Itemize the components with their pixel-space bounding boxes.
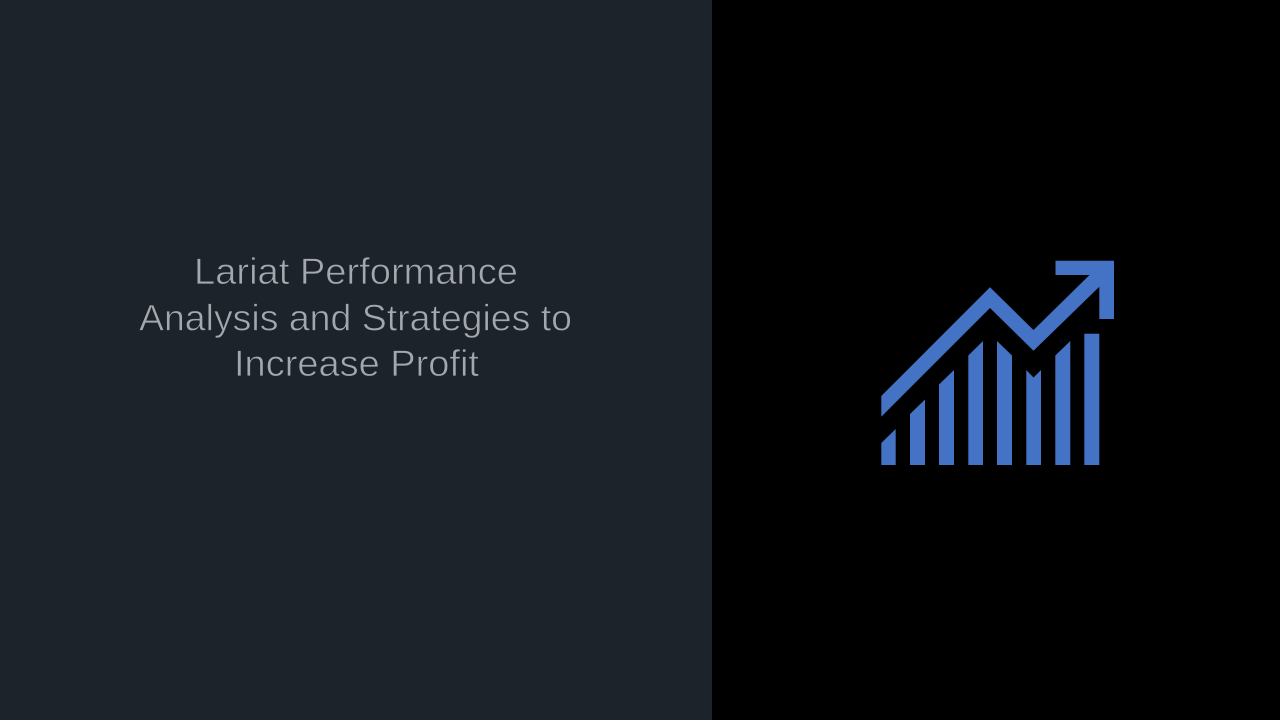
title: Analysis and Strategies to xyxy=(139,298,572,338)
title xyxy=(139,251,572,384)
title: Increase Profit xyxy=(234,343,480,384)
icon: chart bars xyxy=(881,334,1099,465)
panel: right black background xyxy=(712,0,1280,720)
icon: rising bar chart with arrow xyxy=(881,261,1114,465)
icon: trend arrow xyxy=(881,261,1114,417)
title: Lariat Performance xyxy=(194,251,518,292)
panel: left dark title background xyxy=(0,0,712,720)
